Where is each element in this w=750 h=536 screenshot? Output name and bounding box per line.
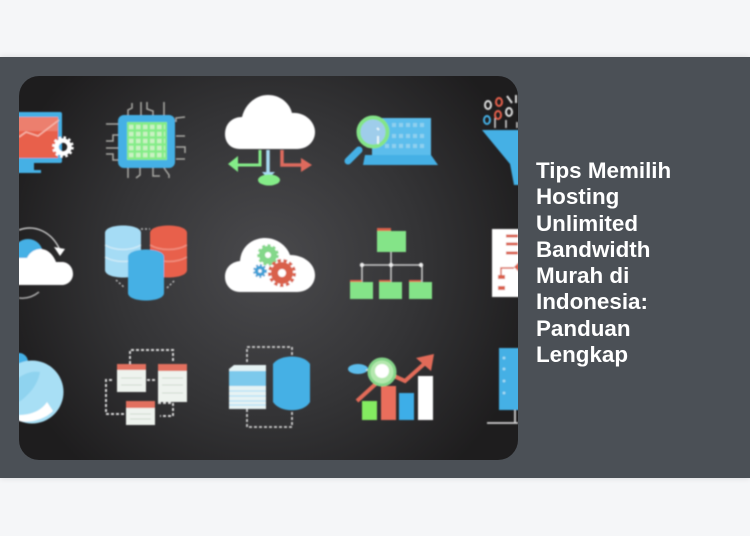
icon: growth bar chart [348,354,434,420]
panel: dark banner [0,57,750,478]
title: Indonesia: [536,289,648,314]
icon: documents to database [229,347,310,427]
illustration: data icons grid [19,76,518,460]
title: Unlimited [536,210,638,236]
title: Hosting [536,184,619,209]
icon: document flowchart [491,228,518,298]
icon: binary data funnel [482,94,518,186]
icon: server rack [486,347,518,425]
icon: database cluster [105,226,187,300]
title [536,158,671,367]
icon: cloud sync [10,228,73,298]
title: Bandwidth [536,237,650,262]
icon: cloud with arrows [225,95,315,186]
title: Tips Memilih [536,158,671,183]
title: Panduan [536,316,631,340]
icon: microchip [106,102,185,178]
icon: magnifier over laptop [348,118,438,165]
icon: folder hierarchy [350,228,432,299]
icon: globe [0,353,64,424]
title: Lengkap [536,342,628,367]
title: Murah di [536,263,629,288]
icon: cloud with gears [225,238,315,292]
icon: monitor with chart [10,112,72,173]
icon: linked tables [106,350,187,425]
